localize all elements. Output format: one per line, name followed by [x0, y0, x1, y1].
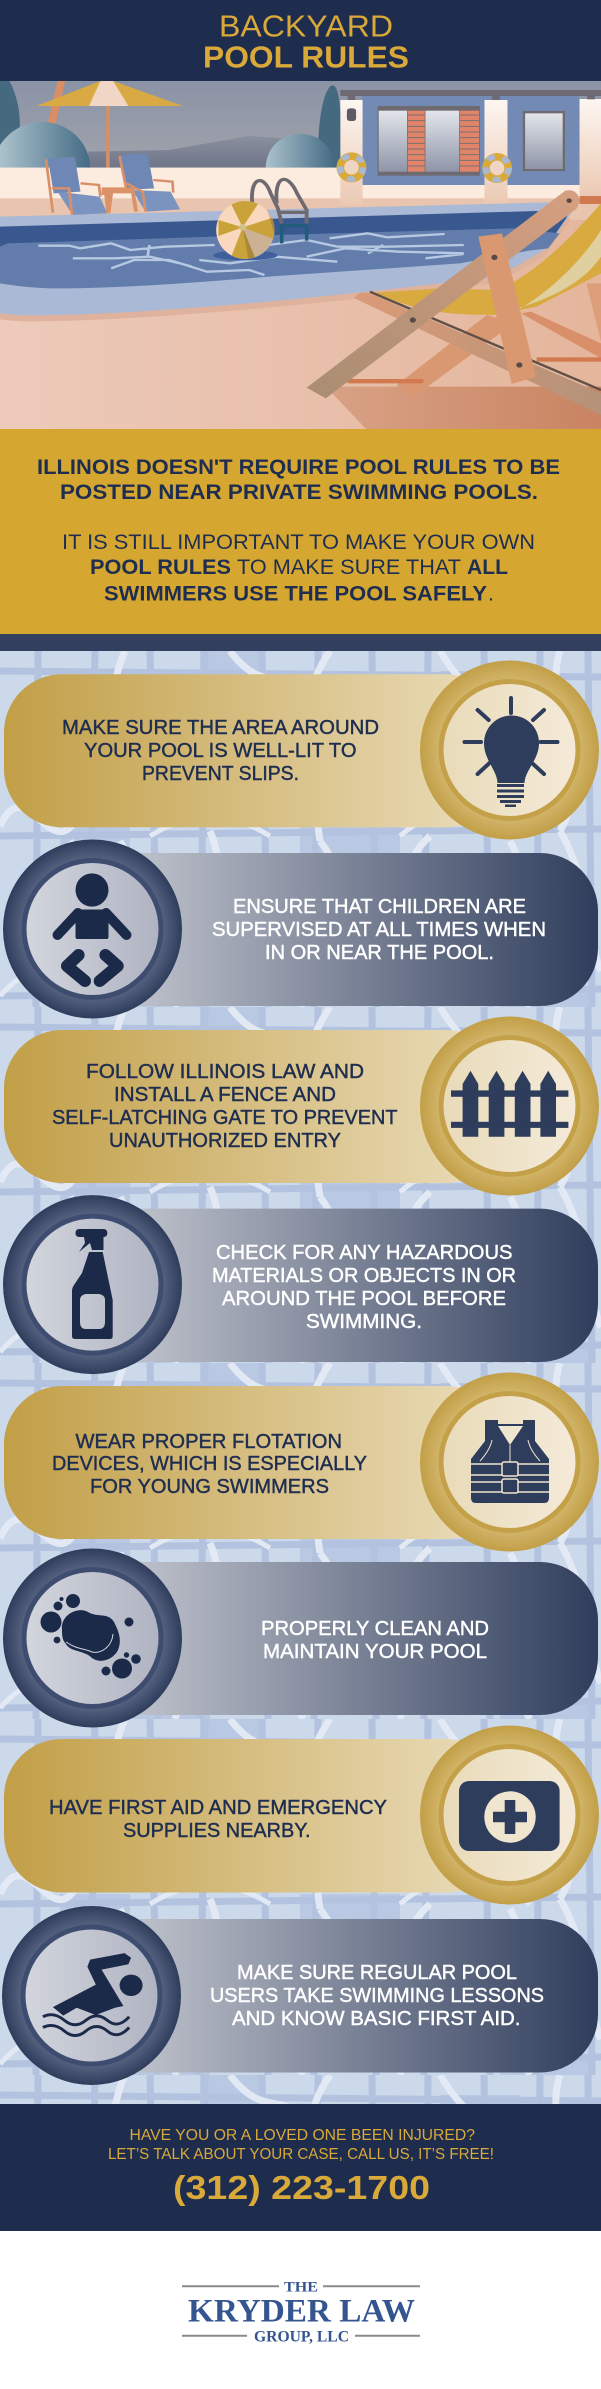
intro bold text: POSTED NEAR PRIVATE SWIMMING POOLS.	[60, 480, 538, 504]
intro second paragraph	[62, 530, 535, 605]
rule 5 text: WEAR PROPER FLOTATION	[76, 1430, 342, 1453]
rule 6 text: MAINTAIN YOUR POOL	[263, 1640, 487, 1663]
intro second paragraph: .	[488, 581, 494, 605]
rule 1 text: YOUR POOL IS WELL-LIT TO	[84, 739, 356, 762]
rule 8 text: MAKE SURE REGULAR POOL	[237, 1961, 517, 1984]
rule 2 text: ENSURE THAT CHILDREN ARE	[233, 895, 526, 918]
logo: the kryder law group: GROUP, LLC	[254, 2329, 349, 2346]
footer call to action	[0, 2104, 601, 2231]
logo: the kryder law group: KRYDER LAW	[188, 2294, 415, 2330]
rule 8 text	[210, 1961, 544, 2030]
icon badge: fence	[420, 1016, 599, 1196]
intro second paragraph: IT IS STILL IMPORTANT TO MAKE YOUR OWN	[62, 530, 535, 554]
intro second paragraph: ALL	[467, 555, 508, 579]
panel: rule 5 flotation	[4, 1372, 599, 1552]
panel: rule 1 lighting	[4, 660, 599, 840]
rule 1 text: MAKE SURE THE AREA AROUND	[62, 716, 379, 739]
rule 3 text	[52, 1060, 398, 1152]
title: backyard: BACKYARD	[219, 9, 393, 44]
rule 7 text: SUPPLIES NEARBY.	[123, 1819, 310, 1842]
illustration: backyard pool scene	[0, 81, 601, 429]
call to action text	[108, 2127, 494, 2163]
lifebuoys	[337, 152, 512, 183]
intro bold text: ILLINOIS DOESN'T REQUIRE POOL RULES TO BE	[37, 455, 560, 479]
call to action text: HAVE YOU OR A LOVED ONE BEEN INJURED?	[130, 2127, 475, 2144]
icon badge: baby	[3, 840, 182, 1018]
deck chair	[307, 190, 601, 415]
rule 4 text: MATERIALS OR OBJECTS IN OR	[212, 1264, 516, 1287]
house	[340, 90, 601, 205]
panel: rule 4 hazards	[3, 1195, 598, 1374]
ladder	[252, 179, 307, 243]
rule 3 text: FOLLOW ILLINOIS LAW AND	[86, 1060, 364, 1083]
icon badge: spray bottle	[3, 1195, 182, 1374]
rule 4 text: AROUND THE POOL BEFORE	[222, 1287, 506, 1310]
water pattern background	[0, 651, 601, 2104]
icon badge: sponge and bubbles	[3, 1548, 182, 1728]
panel: rule 6 cleaning	[3, 1548, 598, 1728]
call to action text: LET’S TALK ABOUT YOUR CASE, CALL US, IT’S FREE!	[108, 2146, 494, 2163]
rule 1 text: PREVENT SLIPS.	[142, 762, 299, 785]
swimming pool	[0, 202, 571, 321]
rule 8 text: USERS TAKE SWIMMING LESSONS	[210, 1984, 544, 2007]
phone number: (312) 223-1700	[173, 2169, 430, 2206]
intro second paragraph: POOL RULES	[90, 555, 231, 579]
panel: rule 3 fence	[4, 1016, 599, 1196]
intro second paragraph: TO MAKE SURE THAT	[237, 555, 461, 579]
icon badge: first aid kit	[420, 1726, 599, 1904]
rule 1 text	[62, 716, 379, 785]
rule 4 text	[212, 1241, 516, 1333]
dark divider band	[0, 634, 601, 651]
rule 2 text: IN OR NEAR THE POOL.	[265, 941, 494, 964]
header banner	[0, 0, 601, 81]
rule 3 text: INSTALL A FENCE AND	[114, 1083, 336, 1106]
rule 5 text: DEVICES, WHICH IS ESPECIALLY	[52, 1452, 367, 1475]
rule 4 text: SWIMMING.	[306, 1310, 422, 1333]
rule 6 text: PROPERLY CLEAN AND	[261, 1617, 489, 1640]
panel: intro statement	[0, 429, 601, 634]
rule 5 text: FOR YOUNG SWIMMERS	[90, 1475, 329, 1498]
panel: rule 2 supervision	[3, 840, 598, 1018]
rule 5 text	[52, 1430, 367, 1498]
logo: the kryder law group	[182, 2280, 420, 2346]
icon badge: light bulb	[420, 660, 599, 840]
rule 7 text: HAVE FIRST AID AND EMERGENCY	[49, 1796, 387, 1819]
panel: rule 8 swimming lessons	[2, 1906, 598, 2085]
rule 4 text: CHECK FOR ANY HAZARDOUS	[216, 1241, 512, 1264]
icon badge: swimmer	[2, 1906, 181, 2085]
logo: the kryder law group: THE	[284, 2280, 318, 2296]
beach ball	[213, 200, 280, 263]
title: pool rules: POOL RULES	[203, 40, 409, 75]
icon badge: life vest	[420, 1372, 599, 1552]
panel: rule 7 first aid	[4, 1726, 599, 1904]
ground	[0, 220, 601, 429]
lounge chairs and table	[46, 153, 180, 215]
rule 2 text	[212, 895, 546, 964]
rule 7 text	[49, 1796, 387, 1842]
rule 3 text: SELF-LATCHING GATE TO PREVENT	[52, 1106, 398, 1129]
intro bold text	[37, 455, 560, 504]
rule 6 text	[261, 1617, 489, 1663]
rule 2 text: SUPERVISED AT ALL TIMES WHEN	[212, 918, 546, 941]
rule 8 text: AND KNOW BASIC FIRST AID.	[232, 2007, 520, 2030]
rule 3 text: UNAUTHORIZED ENTRY	[109, 1129, 341, 1152]
intro second paragraph: SWIMMERS USE THE POOL SAFELY	[104, 581, 487, 605]
